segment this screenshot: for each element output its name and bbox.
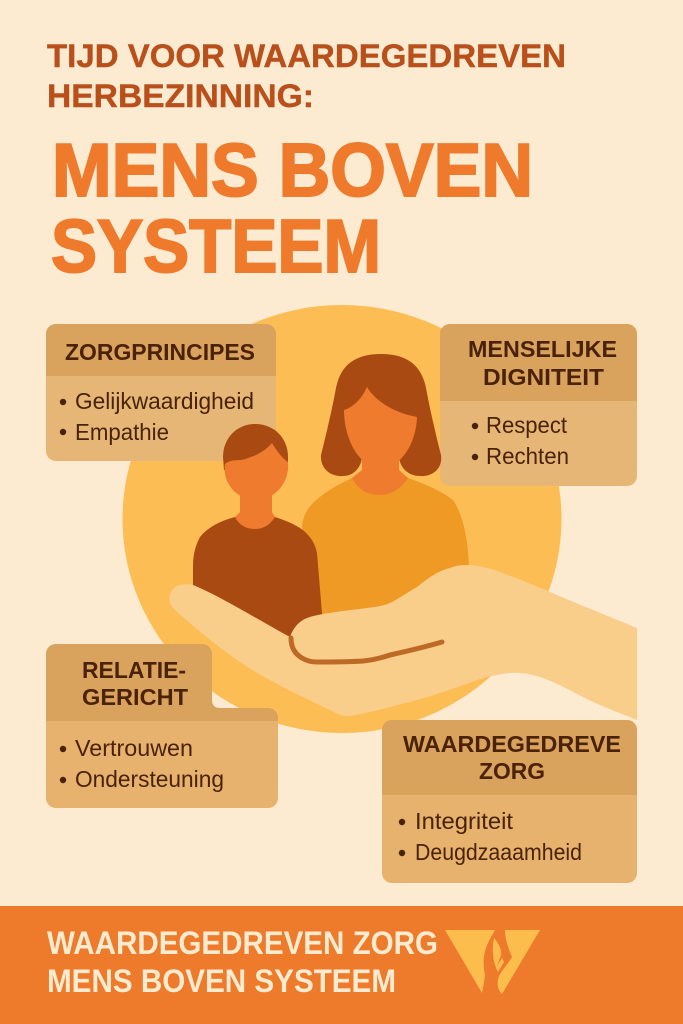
panel: waardegedreven zorg (382, 720, 637, 883)
title: main heading: MENS BOVEN (52, 128, 533, 212)
panel: zorgprincipes: Empathie (75, 419, 169, 445)
illustration: woman (302, 354, 469, 640)
panel: relatiegericht (46, 644, 278, 808)
footer text: MENS BOVEN SYSTEEM (47, 963, 396, 999)
illustration: sun circle (122, 305, 562, 733)
title: subheading: TIJD VOOR WAARDEGEDREVEN (47, 38, 566, 74)
hand crease (291, 638, 442, 662)
panel: relatiegericht: GERICHT (82, 684, 189, 710)
panel: relatiegericht: Vertrouwen (75, 735, 193, 761)
title: main heading: SYSTEEM (51, 204, 381, 288)
illustration: caring hand (169, 565, 637, 720)
illustration: child (193, 424, 323, 645)
title: subheading: HERBEZINNING: (47, 78, 314, 114)
panel: menselijke digniteit: Respect (486, 412, 568, 438)
footer band (0, 906, 683, 1024)
panel: menselijke digniteit (440, 324, 637, 486)
panel header: relatiegericht (46, 644, 278, 721)
panel: zorgprincipes: Gelijkwaardigheid (75, 388, 254, 414)
panel: zorgprincipes: ZORGPRINCIPES (65, 339, 255, 365)
panel header: menselijke digniteit (440, 324, 637, 401)
panel header: zorgprincipes (46, 324, 276, 376)
title: subheading (47, 38, 566, 114)
panel: relatiegericht: RELATIE- (82, 657, 186, 683)
icon: triangle logo with hands (445, 930, 540, 994)
panel: waardegedreven zorg: WAARDEGEDREVE (403, 731, 621, 757)
footer text (47, 925, 438, 999)
panel: waardegedreven zorg: Integriteit (415, 808, 514, 834)
panel: menselijke digniteit: DIGNITEIT (483, 364, 605, 390)
footer text: WAARDEGEDREVEN ZORG (47, 925, 438, 961)
panel: zorgprincipes (46, 324, 276, 461)
panel: waardegedreven zorg: Deugdzaaamheid (415, 839, 582, 865)
panel header: waardegedreven zorg (382, 720, 637, 795)
panel: menselijke digniteit: MENSELIJKE (468, 336, 617, 362)
panel: waardegedreven zorg: ZORG (479, 758, 545, 784)
panel: relatiegericht: Ondersteuning (75, 766, 224, 792)
title: main heading (51, 128, 533, 288)
panel: menselijke digniteit: Rechten (486, 443, 569, 469)
